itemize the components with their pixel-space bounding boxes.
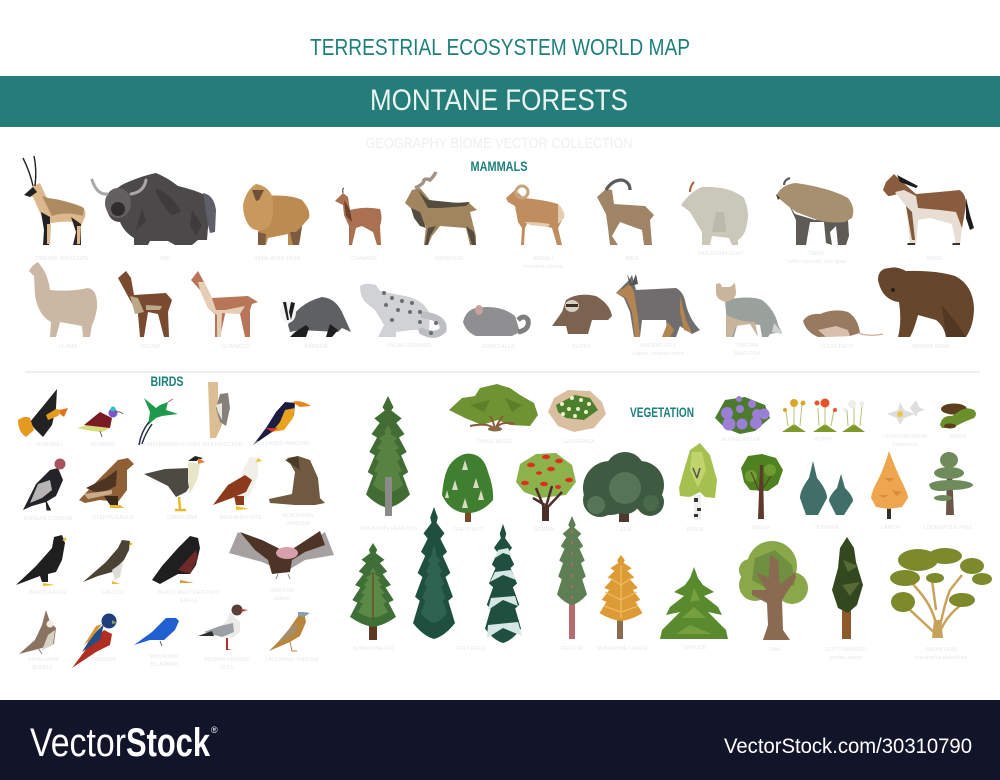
tree: subalpine fir: SUBALPINE FIR	[352, 646, 394, 652]
bird: trogon	[72, 614, 117, 668]
plant: edelweiss: Edelweiss	[893, 442, 918, 448]
animal: tibetan sand fox: SAND FOX	[733, 351, 761, 357]
plant: moss: MOSS	[950, 434, 966, 440]
bird: pygmy woodpecker	[181, 382, 243, 448]
animal: tibetan antelope	[23, 156, 89, 262]
animal: mountain goat: MOUNTAIN GOAT	[698, 251, 744, 257]
bird: collared aracari: COLLARED ARACARI	[254, 441, 310, 447]
bird: northern harrier	[269, 456, 325, 527]
logo: ®	[211, 725, 218, 735]
logo: Vector	[30, 721, 126, 765]
tree: fir tree: FIR TREES	[457, 646, 486, 652]
bird: falcon	[83, 540, 133, 596]
bird: hummingbird	[139, 398, 180, 448]
bird: andean condor	[23, 458, 72, 522]
animal: brown bear: BROWN BEAR	[912, 344, 950, 350]
bird: hornbill	[18, 389, 68, 448]
bird: hornbill: HORNBILL	[36, 442, 64, 448]
animal: snow leopard: SNOW LEOPARD	[387, 343, 431, 349]
animal: badger: BADGER	[304, 344, 328, 350]
bird: laughing thrush: LAUGHING THRUSH	[265, 657, 319, 663]
tree: birch	[679, 443, 717, 533]
animal: tibetan sand fox: TIBETAN	[736, 343, 758, 349]
plant: poppy: POPPY	[814, 437, 833, 443]
animal: tuco-tuco	[803, 310, 883, 350]
animal: snow leopard	[360, 284, 443, 349]
tree: rowan: ROWAN	[534, 527, 554, 533]
animal: argali: ARGALI	[533, 256, 554, 262]
bird: brown-headed gull: BROWN HEADED	[204, 657, 250, 663]
animal: himalayan tahr: HIMALAYAN TAHR	[254, 256, 301, 262]
plant: edelweiss	[883, 400, 928, 448]
tree: larch	[871, 451, 908, 531]
plant: saxifraga: SAXIFRAGA	[563, 439, 595, 445]
animal: ibex	[597, 180, 654, 262]
tree: larch: LARCH	[881, 525, 899, 531]
plant: saxifraga	[548, 390, 606, 445]
tree: spruce	[660, 567, 728, 651]
tree: spruce: SPRUCE	[684, 645, 707, 651]
tree: birch: BIRCH	[686, 527, 704, 533]
animal: argali: mountain sheep	[523, 264, 563, 270]
tree: snowy fir	[485, 524, 522, 643]
bird: northern harrier: HARRIER	[286, 521, 310, 527]
bird: mountain bluebird: MOUNTAIN	[150, 654, 178, 660]
tree: pinus mugo: PINUS MUGO	[477, 439, 513, 445]
tree: snow gum: SNOW GUM	[925, 647, 957, 653]
animal: argali	[506, 186, 564, 270]
animal: vicuna: VICUNA	[140, 344, 161, 350]
tree: chestnut	[442, 454, 493, 533]
animal: sloth	[552, 295, 612, 350]
animal: vicuna	[118, 271, 172, 350]
animal: ibex: IBEX	[626, 256, 639, 262]
tree: fir tree	[413, 507, 486, 652]
bird: himalayan bulbul: HIMALAYAN	[28, 657, 59, 663]
bird: brown-headed gull: GULL	[220, 665, 234, 671]
bird: steppe eagle: STEPPE EAGLE	[92, 515, 134, 521]
animal: kiang: KIANG	[926, 256, 944, 262]
heading: mammals: MAMMALS	[470, 158, 528, 174]
bird: brahminy kite: BRAHMINY KITE	[220, 515, 263, 521]
plant: poppy	[782, 398, 865, 443]
bird: laughing thrush	[265, 612, 319, 663]
animal: kiang	[883, 174, 974, 262]
tree: red fir	[557, 516, 587, 652]
animal: sloth: SLOTH	[572, 344, 590, 350]
animal: yak	[92, 173, 216, 262]
tree: cottonwood	[826, 537, 866, 661]
animal: tuco-tuco: TUCO-TUCO	[820, 344, 854, 350]
panel: mammals	[23, 156, 974, 357]
bird: black and chestnut eagle: EAGLE	[180, 598, 199, 604]
bird: brahminy kite	[213, 457, 263, 521]
tree: snow gum	[890, 548, 992, 661]
tree: chestnut: CHESTNUT	[453, 527, 484, 533]
bird: sunbird: SUNBIRD	[91, 442, 115, 448]
tree: elm: ELM	[620, 527, 632, 533]
bird: griffon vulture: vulture	[274, 596, 290, 602]
animal: llama: LLAMA	[59, 344, 77, 350]
panel: birds	[16, 382, 334, 671]
plant: alpine aster: ALPINE ASTER	[721, 437, 761, 443]
bird: himalayan bulbul: BULBUL	[32, 665, 54, 671]
bird: black and chestnut eagle	[152, 536, 221, 604]
plant: alpine aster	[715, 396, 770, 443]
animal: andean fox: culpeo, andean zorro	[632, 351, 684, 357]
tree: pinus mugo	[449, 384, 538, 445]
bird: andean condor: ANDEAN CONDOR	[24, 516, 72, 522]
animal: takin	[776, 178, 853, 265]
animal: tibetan antelope: TIBETAN ANTELOPE	[35, 256, 89, 262]
tree: beech	[741, 454, 783, 531]
bird: mountain bluebird: BLUEBIRD	[150, 662, 178, 668]
animal: guanaco: GUANACO	[221, 344, 250, 350]
animal: chinchilla: CHINCHILLA	[482, 344, 515, 350]
animal: badger	[280, 297, 351, 350]
bird: sunbird	[77, 406, 123, 448]
tree: subalpine fir	[350, 543, 396, 652]
animal: takin: cattle chamois, gnu goat	[786, 259, 846, 265]
heading: birds: BIRDS	[150, 373, 184, 389]
tree: elm	[583, 452, 664, 533]
tree: mountain hemlock: MOUNTAIN HEMLOCK	[360, 526, 418, 532]
tree: lodgepole pine	[924, 452, 973, 531]
footer bar	[0, 700, 1000, 780]
divider	[25, 371, 980, 373]
animal: chamois	[335, 188, 382, 262]
tree: cottonwood: COTTONWOOD	[826, 647, 866, 653]
bird: pygmy woodpecker: PYGMY WOODPECKER	[181, 442, 243, 448]
bird: steppe eagle	[79, 458, 134, 521]
tree: oak	[739, 541, 808, 653]
bird: black eagle	[16, 535, 67, 596]
tree: subalpine larch	[596, 555, 648, 652]
bird: collared aracari	[253, 401, 311, 447]
tree: red fir: RED FIR	[561, 646, 583, 652]
bird: falcon: FALCON	[102, 590, 124, 596]
bird: caracara	[144, 456, 205, 521]
title: TERRESTRIAL ECOSYSTEM WORLD MAP	[310, 34, 690, 60]
animal: chinchilla	[463, 305, 528, 350]
animal: mountain goat	[681, 182, 748, 257]
tree: cottonwood: poplar, aspen	[829, 655, 863, 661]
tree: subalpine larch: SUBALPINE LARCH	[596, 646, 648, 652]
plant: edelweiss: LEONTOPODIUM	[883, 434, 928, 440]
bird: griffon vulture: GRIFFON	[270, 588, 294, 594]
animal: yak: YAK	[160, 256, 171, 262]
tree: rowan	[516, 453, 576, 533]
tree: mountain hemlock	[360, 396, 418, 532]
panel: vegetation	[350, 384, 992, 661]
animal: tibetan sand fox	[716, 283, 782, 357]
animal: brown bear	[878, 267, 974, 350]
animal: takin: TAKIN	[808, 251, 824, 257]
banner: MONTANE FORESTS	[370, 84, 628, 117]
animal: guanaco	[191, 271, 258, 350]
image id: VectorStock.com/30310790	[724, 735, 972, 758]
tree: lodgepole pine: LODGEPOLE PINE	[924, 525, 972, 531]
plant: moss	[940, 404, 976, 440]
bird: mountain bluebird	[134, 618, 179, 668]
banner	[0, 76, 1000, 127]
tree: snow gum: eucalyptus pauciflora	[915, 655, 968, 661]
bird: griffon vulture	[229, 531, 334, 602]
bird: caracara: CARACARA	[167, 515, 198, 521]
bird: northern harrier: NORTHERN	[282, 513, 314, 519]
bird: trogon: TROGON	[91, 657, 115, 663]
animal: markhor	[405, 172, 477, 262]
bird: hummingbird: HUMMINGBIRD	[140, 442, 180, 448]
tree: juniper: JUNIPER	[815, 525, 839, 531]
tree: beech: BEECH	[752, 525, 771, 531]
tree: juniper	[800, 461, 853, 531]
logo	[30, 721, 218, 765]
animal: llama	[29, 262, 97, 350]
animal: andean fox	[616, 274, 700, 357]
animal: markhor: MARKHOR	[435, 256, 463, 262]
logo: Stock	[126, 721, 211, 765]
animal: chamois: CHAMOIS	[351, 256, 377, 262]
tree: oak: OAK	[769, 647, 781, 653]
animal: andean fox: ANDEAN FOX	[640, 343, 676, 349]
heading: vegetation: VEGETATION	[630, 404, 694, 420]
animal: himalayan tahr	[243, 184, 309, 262]
subtitle: GEOGRAPHY BIOME VECTOR COLLECTION	[366, 135, 632, 152]
bird: black and chestnut eagle: BLACK AND CHESTNUT	[158, 590, 221, 596]
bird: black eagle: BLACK EAGLE	[29, 590, 67, 596]
bird: himalayan bulbul	[19, 610, 59, 671]
bird: brown-headed gull	[198, 604, 250, 671]
